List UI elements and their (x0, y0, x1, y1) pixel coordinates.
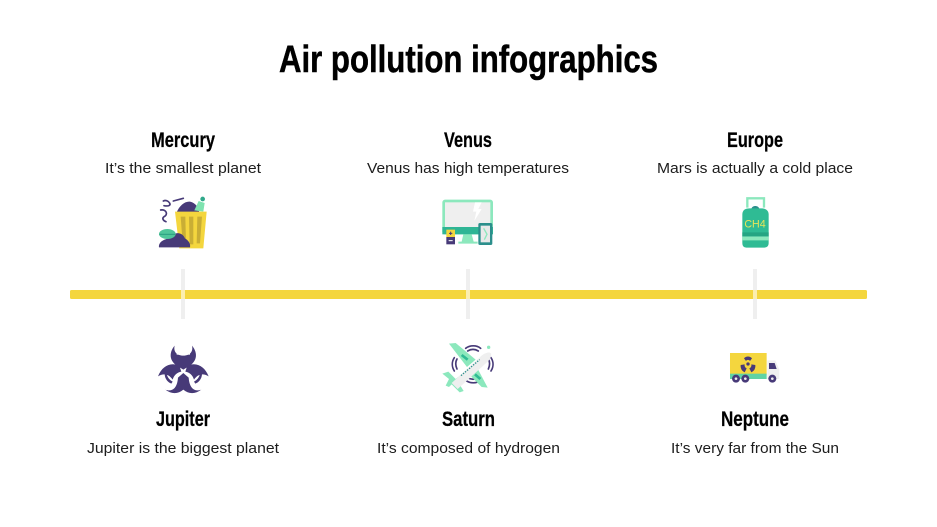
item: Mercury (105, 129, 262, 248)
heading: Europe: Europe (727, 129, 783, 152)
item: Jupiter (87, 346, 280, 457)
icon: airplane (442, 343, 493, 392)
text: Saturn description: It’s composed of hydrogen (377, 440, 560, 457)
icon: biohazard (158, 346, 209, 393)
item: Saturn (377, 343, 560, 457)
icon: computer (442, 200, 493, 245)
text: Jupiter description: Jupiter is the biggest planet (87, 440, 280, 457)
heading: Venus: Venus (444, 129, 492, 152)
icon: trash bin (159, 197, 207, 248)
heading: Saturn: Saturn (442, 408, 495, 431)
icon: gas cylinder: CH4 (744, 219, 766, 231)
item: Europe (657, 129, 853, 248)
icon: truck (730, 353, 779, 383)
heading: Neptune: Neptune (721, 408, 789, 431)
text: Venus description: Venus has high temperatures (367, 160, 569, 177)
timeline (70, 269, 867, 319)
title: Air pollution infographics (279, 39, 658, 81)
text: Mercury description: It’s the smallest planet (105, 160, 262, 177)
text: Neptune description: It’s very far from the Sun (671, 440, 839, 457)
heading: Mercury: Mercury (151, 129, 215, 152)
item: Venus (367, 129, 569, 245)
item: Neptune (671, 353, 839, 457)
icon: gas cylinder (742, 198, 769, 248)
heading: Jupiter: Jupiter (156, 408, 210, 431)
text: Europe description: Mars is actually a cold place (657, 160, 853, 177)
